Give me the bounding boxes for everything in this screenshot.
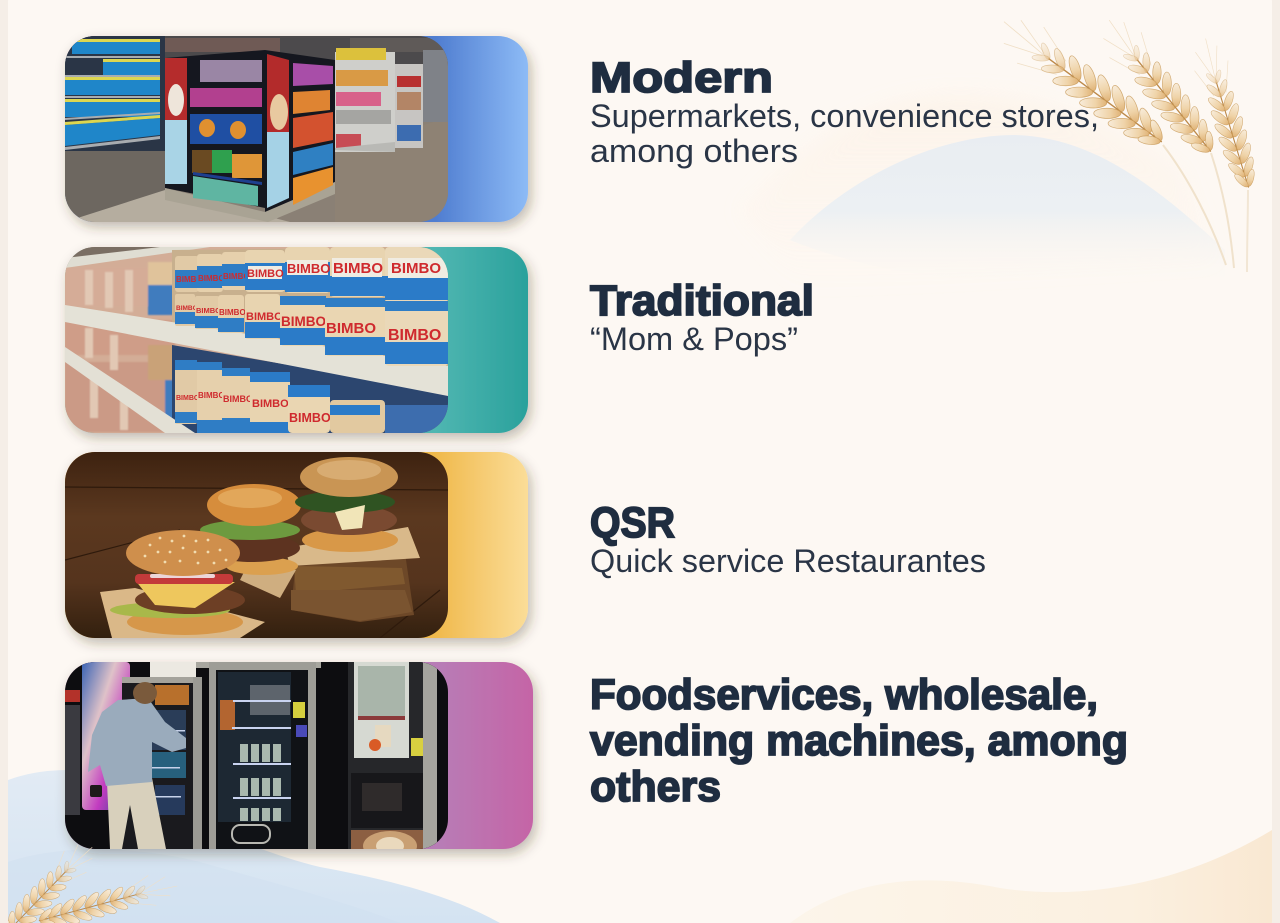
bread bags: BIMBO [287, 261, 330, 276]
card: Traditional [65, 247, 528, 433]
bread bags: BIMBO [246, 311, 283, 323]
card background blue [65, 36, 528, 222]
text: Traditional description: “Mom & Pops” [590, 321, 798, 357]
card background purple [65, 662, 533, 849]
photo: supermarket display [65, 36, 448, 222]
heading: QSR: QSR [590, 499, 675, 547]
bread bags: BIMBO [198, 274, 225, 283]
bread bags: BIMBO [198, 391, 225, 400]
card: Foodservices [65, 662, 533, 861]
crates [291, 553, 414, 622]
bread bags [175, 247, 448, 433]
bread bags: BIMBO [388, 327, 441, 344]
bread bags: BIMBO [281, 314, 326, 329]
heading: QSR [590, 499, 986, 579]
bread bags: BIMBO [223, 272, 250, 281]
text: QSR description: Quick service Restaurantes [590, 543, 986, 579]
bread bags: BIMBO [219, 308, 246, 317]
card background yellow [65, 452, 528, 638]
text: Modern description: Supermarkets, convenience stores, [590, 98, 1099, 134]
card: Modern [65, 36, 528, 222]
photo: vending machines [65, 662, 448, 861]
text: Modern description: among others [590, 133, 798, 169]
heading: Foodservices: vending machines, among [590, 717, 1128, 765]
heading: Foodservices: Foodservices, wholesale, [590, 671, 1098, 719]
card background teal [65, 247, 528, 433]
bread bags: BIMBO [326, 320, 376, 337]
text: Modern description [590, 98, 1099, 169]
burger: middle [200, 484, 301, 598]
heading: Traditional: Traditional [590, 277, 814, 325]
photo: burgers [65, 452, 448, 638]
bread bags: BIMBO [391, 260, 441, 277]
bread bags: BIMBO [247, 268, 284, 280]
heading: Traditional [590, 277, 814, 357]
heading: Modern [590, 54, 1099, 169]
bread bags: BIMBO [333, 260, 383, 277]
bread bags: BIMBO [196, 306, 221, 315]
bread bags: BIMBO [223, 394, 253, 404]
heading: Foodservices: others [590, 763, 721, 811]
icon: wheat bottom left [8, 844, 178, 923]
burger: front [100, 530, 265, 638]
card: QSR [65, 452, 528, 638]
bread bags: BIMBO [289, 411, 331, 425]
photo: bread shelves [65, 247, 448, 433]
burger: right [295, 457, 398, 552]
person [88, 682, 186, 849]
heading: Modern: Modern [590, 54, 773, 102]
heading: Foodservices [590, 671, 1128, 811]
bread bags: BIMBO [176, 305, 198, 312]
icon: wheat top right [989, 6, 1265, 272]
bread bags: BIMBO [252, 398, 289, 410]
bread bags: BIMBO [176, 275, 203, 284]
bread bags: BIMBO [176, 395, 200, 402]
